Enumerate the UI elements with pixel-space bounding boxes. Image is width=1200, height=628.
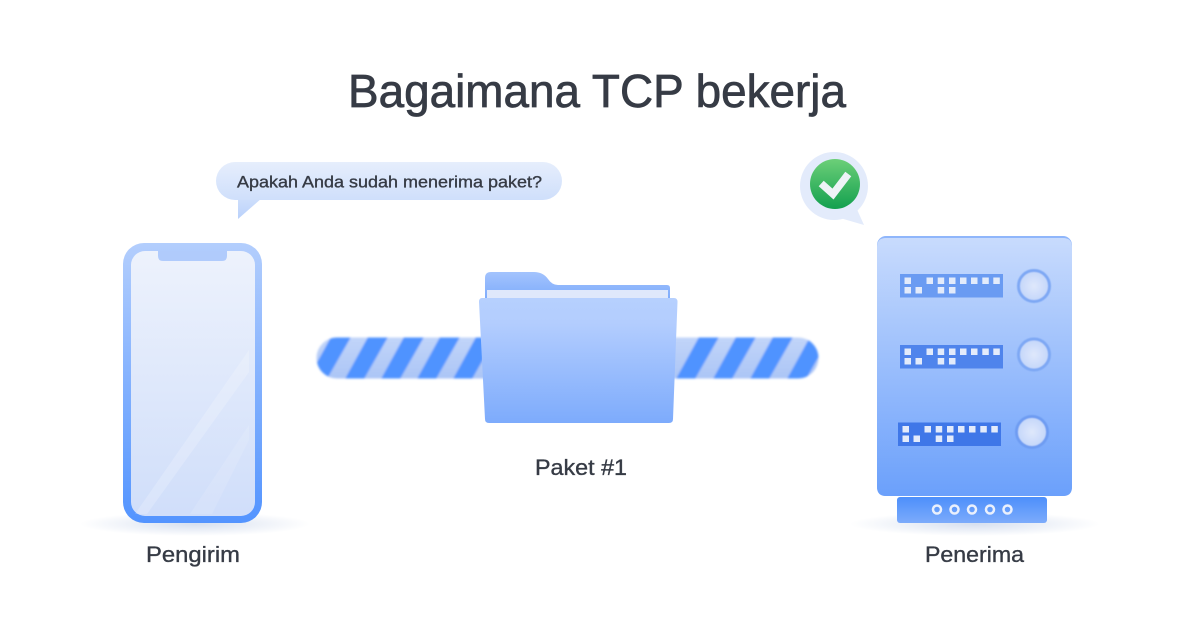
speech bubble: question <box>216 162 562 219</box>
label: receiver: Penerima <box>925 542 1025 567</box>
icon: folder <box>479 272 678 423</box>
rack 1 <box>900 270 1050 302</box>
icon: server (receiver) <box>850 236 1100 536</box>
speech bubble: question: Apakah Anda sudah menerima paket? <box>237 172 542 192</box>
rack 2 <box>900 339 1050 370</box>
base ports <box>933 506 1012 514</box>
icon: check bubble <box>800 152 868 225</box>
progress bar <box>308 337 830 379</box>
label: packet: Paket #1 <box>535 455 627 480</box>
icon: phone (sender) <box>80 243 310 536</box>
title: Bagaimana TCP bekerja <box>348 65 846 117</box>
label: sender: Pengirim <box>146 542 240 567</box>
rack 3 <box>898 416 1048 448</box>
